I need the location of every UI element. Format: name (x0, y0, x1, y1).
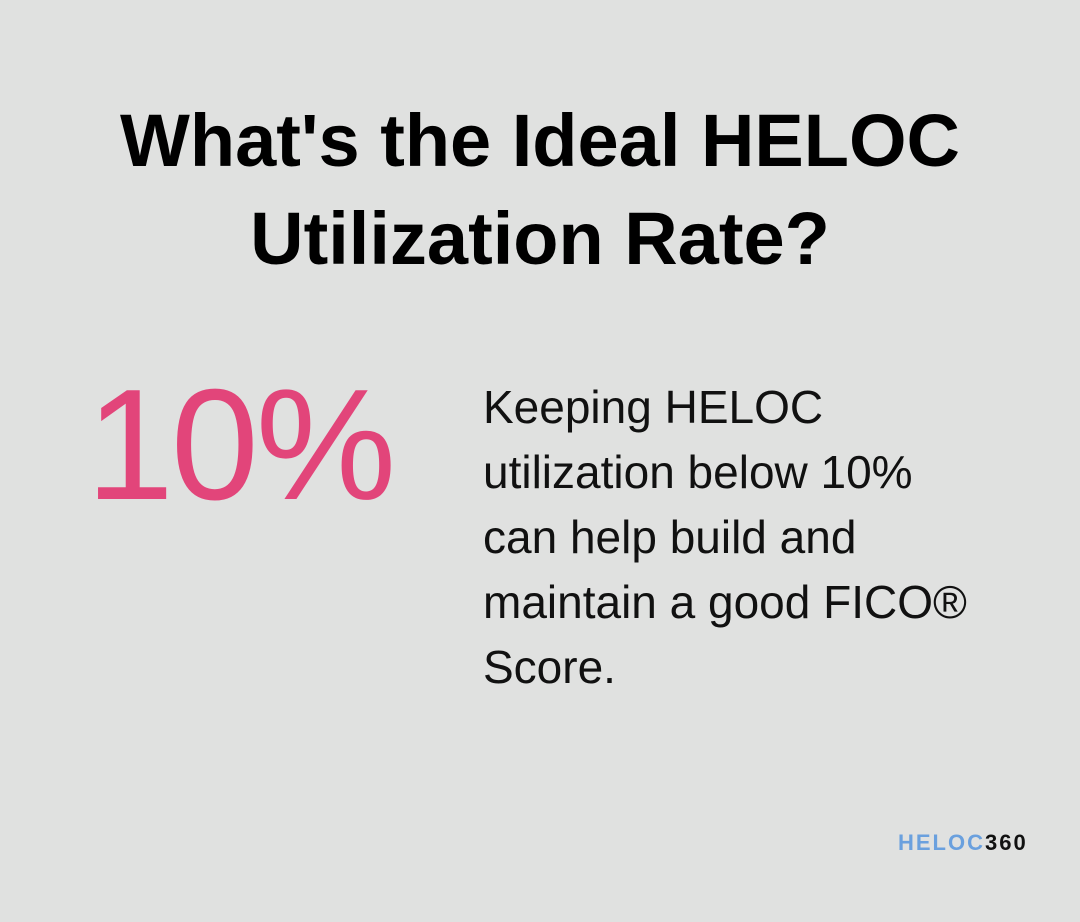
title: Utilization Rate? (250, 197, 830, 280)
text block: description: Keeping HELOC (483, 381, 823, 433)
logo: HELOC360: HELOC360 (898, 830, 1028, 855)
title: What's the Ideal HELOC (120, 99, 960, 182)
stat: 10%: 10% (86, 357, 393, 533)
text block: description: can help build and (483, 511, 856, 563)
text block: description: maintain a good FICO® (483, 576, 967, 628)
title (120, 99, 960, 280)
text block: description: Score. (483, 641, 616, 693)
text block: description (483, 381, 967, 693)
text block: description: utilization below 10% (483, 446, 913, 498)
